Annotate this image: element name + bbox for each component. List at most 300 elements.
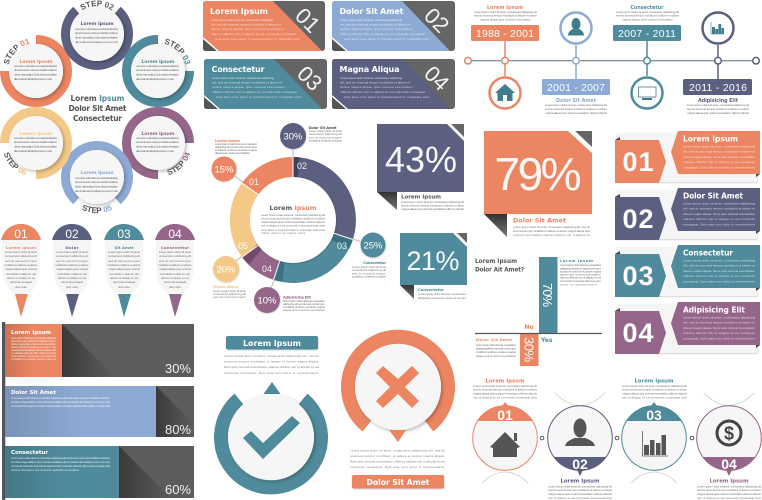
pin 03: commodo consequat: [113, 280, 135, 284]
step 04 circle: Lorem ipsum dolor sit amet, consectetur adipiscing: [136, 136, 179, 140]
label right: Consectetur: [363, 261, 386, 265]
center title: Consectetur: [73, 114, 122, 123]
paragraph: eiusmod tempor incididunt ut labore et dolore magna aliqua.: [224, 360, 319, 364]
row 03: ullamco laboris nisi ut aliquip ex ea commodo: [683, 274, 755, 278]
year 2001-2007: 2001 - 2007: [547, 82, 605, 94]
label bottom-left: sed do eiusmod tempor: [213, 295, 246, 299]
yes label: Yes: [540, 337, 553, 344]
panel: 79% callout: nostrud exercitation ullamco laboris nisi ut aliquip ex: [513, 233, 590, 237]
card 04: elit, sed do eiusmod tempor incididunt ut labore et: [340, 80, 410, 84]
step 01 circle: Lorem ipsum dolor sit amet, consectetur adipiscing: [14, 64, 57, 68]
step 06 circle: [4, 112, 68, 174]
label bottom-right: aliqua quis nostrud exercitation: [283, 308, 325, 312]
card 01: Lorem ipsum dolor sit amet, consectetur adipiscing: [211, 18, 273, 22]
caption 4: sed do eiusmod tempor incididunt ut labore et dolore: [687, 107, 749, 111]
bubble 20%: 20%: [216, 264, 236, 276]
step 01 circle: dolore magna aliqua. Quis nostrud exercitation: [14, 72, 57, 76]
caption 3: Lorem Ipsum: [634, 378, 674, 384]
pin 02: Lorem ipsum dolor sit amet: [56, 250, 88, 254]
panel: 43% callout: Lorem ipsum dolor sit amet, consectetur adipiscing elit: [401, 200, 464, 204]
caption 2: [545, 98, 608, 115]
row 02: ullamco laboris nisi ut aliquip ex ea commodo: [683, 217, 755, 221]
connectors: [505, 41, 718, 79]
caption 3: nisi ut aliquip ex ea commodo consequat duis: [622, 396, 688, 400]
panel: yes no chart: [475, 257, 602, 366]
paragraph: Nam quis nostrud exercitation ullamco laboris nisi ut aliquip ex ea: [350, 460, 445, 464]
disc: [228, 394, 314, 480]
segment numbers: 01: [249, 177, 259, 187]
row 02: consequat. Duis aute irure dolor in reprehenderit: [683, 222, 755, 226]
caption 1: Lorem ipsum dolor sit amet, consectetur adipiscing elit: [474, 10, 537, 14]
step 01 circle: ullamco laboris nisi ut aliquip ex ea commodo: [14, 77, 52, 81]
bubble 20%: [213, 256, 239, 282]
label top-right: Dolor Sit Amet: [308, 126, 337, 130]
label top-right: sed do eiusmod tempor: [309, 136, 342, 140]
panel: 21% callout: adipiscing elit sed do eiusmod tempor: [418, 296, 466, 300]
caption 4: sed do eiusmod tempor incididunt ut labore et dolore: [697, 488, 761, 492]
panel: 79% callout: 79%: [494, 148, 582, 200]
step 06 circle: dolore magna aliqua. Quis nostrud exercitation: [14, 144, 57, 148]
step 03 circle: dolore magna aliqua. Quis nostrud exercitation: [136, 72, 179, 76]
left text: [476, 337, 516, 358]
card 04: Lorem ipsum dolor sit amet, consectetur adipiscing: [340, 76, 402, 80]
pin 02: [52, 224, 92, 317]
card 03: dolore magna aliqua. Quis nostrud exercitation: [212, 85, 285, 89]
pin 03: duis aute: [118, 285, 130, 289]
bubble 25%: 25%: [363, 240, 383, 252]
year 2001-2007: [542, 79, 610, 95]
segment numbers: 04: [262, 264, 272, 274]
reflection arcs: [482, 393, 754, 483]
card 01: duis aute irure dolor in reprehenderit in voluptate velit: [215, 37, 300, 41]
bar 80%: Lorem ipsum dolor sit amet, consectetur adipiscing elit, sed do eiusmod tempor incididunt ut labore: [11, 396, 110, 400]
card 01: elit, sed do eiusmod tempor incididunt ut labore et: [211, 22, 281, 26]
caption 1: sed do eiusmod tempor incididunt ut labore et dolore: [473, 388, 537, 392]
pin 02: sed do eiusmod tempor: [56, 259, 88, 263]
card 02: ullamco laboris nisi ut aliquip ex ea commodo consequat: [340, 32, 425, 36]
panel: 21% callout: Consectetur: [418, 287, 444, 292]
row 01: Lorem ipsum dolor sit amet, consectetur adipiscing: [683, 144, 755, 148]
panel: six step circles: [0, 0, 194, 214]
card 03: Consectetur: [212, 65, 265, 74]
center circle: Lorem ipsum dolor sit amet, consectetur adipiscing elit: [261, 213, 325, 217]
pin 01: exercitation ullamco nisi: [6, 272, 36, 276]
bar 60%: consequat. Duis aute irure dolor in reprehenderit in voluptate velit esse cillum dolore eu fugiat nulla: [11, 464, 110, 468]
row 01: dolore magna aliqua. Nunc quis nostrud exercitation: [683, 155, 755, 159]
segment numbers: [238, 161, 347, 274]
center circle: [250, 177, 336, 263]
year 2011-2016: 2011 - 2016: [689, 82, 747, 94]
row 01: ullamco laboris nisi ut aliquip ex ea commodo: [683, 160, 755, 164]
right text: dolor in reprehenderit: [560, 282, 597, 286]
icon: bar chart: [702, 12, 734, 44]
caption 2: [548, 478, 612, 500]
label bottom-left: Lorem ipsum dolor sit amet: [213, 289, 246, 293]
year 2011-2016: [683, 79, 752, 95]
icon: cross: [376, 366, 419, 408]
row 02: elit, sed do eiusmod tempor incididunt ut labore et: [683, 206, 755, 210]
pin 03: magna aliqua quis nostrud: [108, 267, 140, 271]
step 05 circle: Lorem ipsum dolor sit amet, consectetur adipiscing: [75, 176, 118, 180]
paragraph: eiusmod tempor incididunt ut labore et dolore magna aliqua.: [350, 454, 445, 458]
caption 2: sed do eiusmod tempor incididunt ut labore et dolore: [545, 107, 607, 111]
card 03: ullamco laboris nisi ut aliquip ex ea commodo consequat: [212, 90, 297, 94]
pin 03: exercitation ullamco nisi: [109, 272, 139, 276]
label bottom-right: Lorem ipsum dolor sit amet, consectetur: [283, 299, 325, 303]
right text: [560, 258, 601, 286]
pin 01: [1, 224, 41, 317]
caption 1: sed do eiusmod tempor incididunt ut labore et dolore: [474, 14, 537, 18]
panel: 21% callout: 21%: [406, 246, 460, 276]
step 03 circle: elit, sed do eiusmod tempor incididunt ut labore: [136, 68, 179, 72]
small rings: [540, 436, 694, 440]
label bottom-right: adipiscing elit sed do eiusmod tempor: [283, 302, 325, 306]
pin 03: 03: [117, 227, 131, 241]
row 03: consequat. Duis aute irure dolor in reprehenderit: [683, 280, 755, 284]
step 05 circle: elit, sed do eiusmod tempor incididunt ut labore: [75, 180, 118, 184]
left text: Dolor Sit Amet: [476, 337, 512, 342]
segment numbers: 03: [337, 241, 347, 251]
segment numbers: 05: [238, 241, 248, 251]
icon: house: [490, 78, 520, 108]
row 04: Lorem ipsum dolor sit amet, consectetur adipiscing: [683, 316, 755, 320]
row 01: [615, 131, 760, 183]
panel: 43% callout: [377, 124, 464, 211]
pin 02: exercitation ullamco nisi: [57, 272, 87, 276]
card 01: [203, 1, 325, 51]
caption 4: Lorem Ipsum: [710, 478, 749, 484]
label top-left: Lorem ipsum dolor sit amet, consectetur: [215, 142, 257, 146]
caption 3: sed do eiusmod tempor incididunt ut labore et dolore: [616, 14, 679, 18]
step 04 circle: dolore magna aliqua. Quis nostrud exercitation: [136, 144, 179, 148]
pin 01: Lorem Ipsum: [6, 245, 36, 250]
paragraph: Lorem ipsum dolor sit amet, consectetur adipiscing elit, sed do: [350, 448, 445, 452]
panel: 43% callout: magna aliqua quis nostrud exercitation ullamco laboris: [401, 207, 464, 211]
card 02: elit, sed do eiusmod tempor incididunt ut labore et: [340, 22, 410, 26]
label right: consectetur adipiscing elit: [352, 268, 386, 272]
card 03: duis aute irure dolor in reprehenderit in voluptate velit: [216, 95, 301, 99]
panel: check mark: [221, 336, 321, 487]
caption 3: [622, 378, 688, 400]
right text: adipiscing elit sed do eiusmod tempor: [560, 266, 601, 270]
segment numbers: 02: [297, 161, 307, 171]
left text: adipiscing elit sed do eiusmod tempor: [476, 346, 516, 350]
bar 70%: 70%: [540, 283, 555, 307]
pin 03: [104, 224, 144, 317]
row 03: Consectetur: [683, 248, 733, 258]
caption 3: Consectetur: [630, 5, 664, 11]
paragraph: Nam quis nostrud exercitation ullamco laboris nisi ut aliquip ex ea: [224, 365, 319, 369]
connector lines: [235, 149, 362, 288]
label bottom-left: consectetur adipiscing elit: [213, 292, 246, 296]
caption 3: sed do eiusmod tempor incididunt ut labore et dolore: [622, 388, 687, 392]
row 03: [615, 245, 760, 297]
circle 02: 02: [572, 456, 588, 472]
pin 01: commodo consequat: [10, 280, 32, 284]
card 03: 03: [292, 61, 327, 96]
step 02 circle: Lorem Ipsum: [80, 21, 114, 27]
question: [475, 259, 524, 274]
center title: Lorem Ipsum: [70, 94, 125, 103]
pin 01: duis aute: [15, 285, 27, 289]
left text: Lorem ipsum dolor sit amet, consectetur: [476, 343, 516, 347]
row 01: 01: [622, 147, 654, 177]
step labels: STEP 05: [82, 204, 112, 214]
heading pill: [226, 336, 318, 350]
bar 60%: Consectetur: [11, 450, 48, 456]
circle 03: [622, 402, 686, 470]
pin 04: incididunt ut labore et dolore: [158, 263, 192, 267]
bubble 30%: 30%: [283, 132, 303, 142]
panel: four pins: [1, 224, 195, 317]
bar 30%: consequat. Duis aute irure dolor in reprehenderit: [11, 348, 56, 352]
pin 03: Sit Amet: [114, 245, 134, 250]
step 03 circle: Lorem Ipsum: [142, 59, 175, 65]
label top-left: [215, 139, 257, 155]
card 03: elit, sed do eiusmod tempor incididunt ut labore et: [212, 80, 282, 84]
circle 04: 04: [721, 456, 737, 472]
right text: aliqua quis nostrud exercitation: [560, 272, 601, 276]
pin 04: commodo consequat: [164, 280, 186, 284]
label bottom-right: [283, 296, 325, 312]
pin 02: commodo consequat: [61, 280, 83, 284]
arrow up: [264, 382, 280, 394]
timeline nodes: [465, 57, 759, 64]
caption 4: magna aliqua quis nostrud exercitation ullamco laboris: [687, 111, 750, 115]
step 02 circle: dolore magna aliqua. Quis nostrud exercitation: [75, 36, 118, 40]
paragraph: commodo consequat. Duis aute irure dolor in reprehenderit.: [224, 371, 319, 375]
paragraph: commodo consequat. Duis aute irure dolor in reprehenderit.: [350, 465, 445, 469]
card 02: [332, 1, 455, 51]
pin 04: magna aliqua quis nostrud: [159, 267, 191, 271]
row 03: dolore magna aliqua. Nunc quis nostrud exercitation: [683, 269, 755, 273]
row 01: elit, sed do eiusmod tempor incididunt ut labore et: [683, 150, 755, 154]
bar 30%: Lorem Ipsum: [11, 330, 51, 336]
card 02: duis aute irure dolor in reprehenderit in voluptate velit: [344, 37, 429, 41]
bar 60%: et dolore magna aliqua. Quis nostrud exercitation ullamco laboris nisi ut aliquip ex ea commodo: [11, 460, 110, 464]
row 04: consequat. Duis aute irure dolor in reprehenderit: [683, 336, 755, 340]
step 02 circle: Lorem ipsum dolor sit amet, consectetur adipiscing: [75, 27, 118, 31]
caption 1: [474, 5, 537, 22]
question: Dolor Ait Amet?: [475, 268, 524, 274]
bar 30%: [5, 324, 194, 377]
caption 4: [697, 478, 762, 500]
caption 4: [687, 98, 750, 115]
bar 30%: Lorem ipsum dolor sit amet, consectetur adipiscing: [11, 336, 56, 340]
step 05 circle: [66, 146, 128, 204]
panel: 79% callout: Dolor Sit Amet: [513, 218, 566, 224]
donut ring: [240, 167, 345, 272]
right text: incididunt ut labore et dolore magna: [560, 270, 601, 274]
panel: horizontal percentage bars: [2, 322, 194, 500]
card 04: [332, 59, 455, 109]
row 04: 04: [622, 318, 654, 348]
label bottom-right: incididunt ut labore et dolore magna: [283, 305, 325, 309]
step 04 circle: ullamco laboris nisi ut aliquip ex ea commodo: [136, 149, 174, 153]
label right: Lorem ipsum dolor sit amet: [352, 265, 386, 269]
step 01 circle: Lorem Ipsum: [20, 59, 53, 65]
row 04: [615, 302, 760, 354]
pin 04: consectetur adipiscing elit: [159, 254, 191, 258]
step 01 circle: elit, sed do eiusmod tempor incididunt ut labore: [14, 68, 57, 72]
paragraph: [224, 354, 319, 375]
bar 80%: et dolore magna aliqua. Quis nostrud exercitation ullamco laboris nisi ut aliquip ex ea commodo: [11, 400, 110, 404]
label right: incididunt ut labore et dolore: [352, 274, 386, 278]
step 01 circle: [4, 40, 68, 103]
circle 01: 01: [497, 407, 513, 423]
caption 3: Lorem ipsum dolor sit amet, consectetur adipiscing elit: [616, 10, 679, 14]
label top-right: consectetur adipiscing elit: [309, 132, 342, 136]
heading pill: Dolor Sit Amet: [366, 478, 430, 487]
step 06 circle: Lorem Ipsum: [20, 131, 53, 137]
step 04 circle: Lorem Ipsum: [142, 131, 175, 137]
label top-right: [308, 126, 342, 142]
row 02: 02: [622, 204, 654, 234]
pin 03: Lorem ipsum dolor sit amet: [108, 250, 140, 254]
year 2007-2011: 2007 - 2011: [618, 28, 676, 40]
panel: 43% callout: 43%: [385, 139, 457, 180]
question: Lorem Ipsum: [475, 259, 517, 265]
label top-left: aliqua quis nostrud exercitation: [215, 151, 250, 155]
step 02 circle: [66, 7, 128, 65]
arrow down: [389, 430, 406, 442]
caption 1: magna aliqua quis nostrud exercitation ullamco laboris: [473, 392, 538, 396]
row 02: dolore magna aliqua. Nunc quis nostrud exercitation: [683, 212, 755, 216]
pin 02: 02: [65, 227, 79, 241]
center title: [68, 94, 127, 123]
caption 2: magna aliqua quis nostrud exercitation ullamco laboris: [548, 492, 612, 496]
caption 1: Lorem Ipsum: [486, 378, 525, 384]
pin 01: incididunt ut labore et dolore: [4, 263, 38, 267]
icon: monitor: [632, 78, 662, 108]
bar 30%: 30%: [165, 361, 191, 376]
pin 01: Lorem ipsum dolor sit amet: [5, 250, 37, 254]
paragraph: [350, 448, 445, 469]
circle 01: [473, 402, 537, 470]
right text: ullamco laboris nisi ut aliquip ex ea: [560, 276, 601, 280]
bar 30%: 30%: [522, 337, 536, 362]
segment dividers: [242, 157, 353, 280]
row 01: consequat. Duis aute irure dolor in reprehenderit: [683, 166, 755, 170]
bubble 30%: [280, 123, 306, 149]
step 04 circle: [127, 112, 190, 174]
step 03 circle: ullamco laboris nisi ut aliquip ex ea commodo: [136, 77, 174, 81]
row 01: Lorem Ipsum: [683, 134, 738, 144]
pin 01: laboris ut aliquip ex ea: [7, 276, 35, 280]
label bottom-left: Magna Aliqua: [213, 285, 239, 289]
panel: 79% callout: [484, 131, 592, 237]
step 02 circle: elit, sed do eiusmod tempor incididunt ut labore: [75, 31, 118, 35]
pin 02: duis aute: [66, 285, 78, 289]
caption 3: magna aliqua quis nostrud exercitation: [622, 18, 673, 22]
panel: numbered list: [615, 131, 760, 354]
bubble 10%: [254, 287, 280, 313]
step 03 circle: [127, 40, 190, 103]
row 02: Lorem ipsum dolor sit amet, consectetur adipiscing: [683, 202, 755, 206]
right text: Lorem ipsum dolor sit amet, consectetur: [560, 263, 601, 267]
card 02: dolore magna aliqua. Quis nostrud exercitation: [340, 27, 413, 31]
pin 01: sed do eiusmod tempor: [5, 259, 37, 263]
pin 02: magna aliqua quis nostrud: [56, 267, 88, 271]
center circle: cillum dolore eu fugiat nulla: [261, 231, 305, 235]
pin 04: Consectetur: [161, 245, 189, 250]
paragraph: Lorem ipsum dolor sit amet, consectetur adipiscing elit, sed do: [224, 354, 319, 358]
caption 2: Lorem Ipsum: [560, 478, 600, 484]
center circle: irure dolor in reprehenderit in voluptate velit esse: [261, 228, 325, 232]
center circle: sed do eiusmod tempor incididunt ut labore et dolore: [261, 216, 325, 220]
caption 4: Lorem ipsum dolor sit amet, consectetur adipiscing elit: [687, 103, 749, 107]
bar 80%: consequat. Duis aute irure dolor in reprehenderit in voluptate velit esse cillum dolore eu fugiat nulla: [11, 404, 110, 408]
panel: four numbered cards: [203, 1, 455, 109]
step 02 circle: ullamco laboris nisi ut aliquip ex ea commodo: [75, 40, 118, 44]
bubble 25%: [360, 232, 386, 258]
caption 3: magna aliqua quis nostrud exercitation ullamco laboris: [622, 392, 688, 396]
axis: [475, 332, 602, 334]
step labels: [4, 0, 190, 214]
card 04: 04: [419, 61, 454, 96]
right text: commodo consequat duis aute irure: [560, 279, 601, 283]
row 03: Lorem ipsum dolor sit amet, consectetur adipiscing: [683, 258, 755, 262]
no label: No: [524, 324, 534, 331]
circle 04: $: [724, 424, 734, 444]
center circle: Lorem Ipsum: [270, 204, 317, 212]
bubble 10%: 10%: [257, 296, 277, 306]
caption 3: Lorem ipsum dolor sit amet, consectetur adipiscing elit: [622, 384, 687, 388]
bar 80%: 80%: [165, 422, 191, 437]
label top-right: incididunt ut labore et dolore: [309, 138, 342, 142]
step 05 circle: Lorem Ipsum: [80, 170, 114, 176]
label bottom-right: Adipisicing Elit: [283, 296, 311, 300]
card 04: ullamco laboris nisi ut aliquip ex ea commodo consequat: [340, 90, 425, 94]
pin 04: [155, 224, 195, 317]
row 04: dolore magna aliqua. Nunc quis nostrud exercitation: [683, 326, 755, 330]
panel: 43% callout: sed do eiusmod tempor incididunt ut labore et dolore: [401, 204, 464, 208]
caption 4: nisi ut aliquip ex ea commodo consequat duis: [697, 496, 762, 500]
ring: [348, 337, 448, 426]
card 02: 02: [419, 3, 454, 38]
card 04: Magna Aliqua: [340, 65, 400, 74]
card 02: Lorem ipsum dolor sit amet, consectetur adipiscing: [340, 18, 402, 22]
bar 30%: cupidatat non proident sunt in culpa qui: [11, 357, 56, 361]
caption 3: [616, 5, 679, 22]
step 05 circle: ullamco laboris nisi ut aliquip ex ea commodo: [75, 189, 118, 193]
caption 2: Lorem ipsum dolor sit amet, consectetur adipiscing elit: [548, 484, 612, 488]
step labels: STEP 03: [164, 38, 190, 64]
pin 02: Dolor: [66, 245, 79, 250]
pin 04: 04: [168, 227, 182, 241]
bubble 15%: 15%: [214, 164, 234, 176]
step 05 circle: dolore magna aliqua. Quis nostrud exercitation: [75, 184, 118, 188]
caption 1: Lorem ipsum dolor sit amet, consectetur adipiscing elit: [473, 384, 537, 388]
card 01: ullamco laboris nisi ut aliquip ex ea commodo consequat: [211, 32, 296, 36]
pin 02: laboris ut aliquip ex ea: [58, 276, 86, 280]
card 04: duis aute irure dolor in reprehenderit in voluptate velit: [344, 95, 429, 99]
center circle: magna aliqua quis nostrud exercitation ullamco laboris: [261, 220, 326, 224]
bar 60%: 60%: [165, 482, 191, 497]
panel: 21% callout: Lorem ipsum dolor sit amet, consectetur: [418, 292, 466, 296]
bar 30%: dolore magna aliqua. Quis nostrud exercitation: [11, 342, 56, 346]
card 01: Lorem Ipsum: [210, 7, 268, 16]
circle 04: [697, 406, 761, 476]
step 06 circle: elit, sed do eiusmod tempor incididunt ut labore: [14, 140, 57, 144]
caption 1: Lorem Ipsum: [487, 5, 523, 11]
label right: sed do eiusmod tempor: [352, 272, 386, 276]
left text: aliqua quis nostrud exercitation: [476, 354, 516, 358]
step 06 circle: Lorem ipsum dolor sit amet, consectetur adipiscing: [14, 136, 57, 140]
bar 80%: [5, 386, 194, 437]
row 03: 03: [622, 261, 654, 291]
pin 04: duis aute: [169, 285, 181, 289]
